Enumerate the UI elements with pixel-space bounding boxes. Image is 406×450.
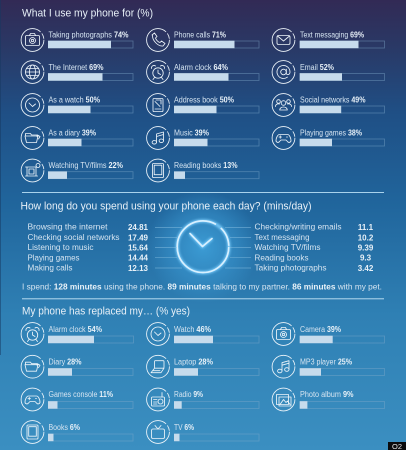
item: The Internet: The Internet 69% [48, 63, 104, 72]
item: Playing games [272, 127, 384, 149]
right list: 9.3 [360, 254, 372, 263]
item: Camera [272, 323, 384, 345]
item: Books: Books 6% [48, 423, 80, 432]
right list: 10.2 [358, 233, 374, 242]
left list: 24.81 [128, 223, 149, 232]
section: time spent [20, 201, 382, 292]
right list: 3.42 [358, 264, 374, 273]
summary sentence: I spend: 128 minutes using the phone. 89 minutes talking to my partner. 86 minutes with my pet. [22, 283, 382, 292]
right list: 9.39 [358, 244, 374, 252]
left list: 14.44 [128, 254, 149, 263]
item: As a watch: As a watch 50% [48, 95, 100, 104]
divider [22, 192, 384, 193]
item: Reading books [147, 159, 259, 182]
item: Phone calls: Phone calls 71% [174, 30, 226, 39]
item: Alarm clock: Alarm clock 64% [174, 63, 228, 72]
section: replaced devices [21, 306, 384, 443]
heading: What I use my phone for: What I use my phone for (%) [22, 8, 153, 20]
item: Phone calls [147, 29, 259, 51]
item: Reading books: Reading books 13% [174, 161, 238, 170]
item: Social networks: Social networks 49% [300, 95, 365, 104]
item: Text messaging [272, 29, 384, 51]
credit: O2 [388, 442, 406, 450]
left connector lines [155, 228, 182, 268]
left list: Listening to music [28, 243, 94, 252]
right list [254, 222, 374, 273]
left list: Playing games [28, 254, 80, 262]
right list: Checking/writing emails [254, 222, 342, 232]
item: Watching TV/films [21, 159, 133, 182]
item: The Internet [21, 61, 133, 83]
item: As a diary: As a diary 39% [48, 128, 96, 137]
left list: Making calls [28, 264, 72, 273]
right list: Reading books [254, 254, 308, 262]
item: As a watch [21, 94, 133, 116]
item: Taking photographs [21, 29, 133, 51]
section: phone uses [21, 8, 384, 182]
item: Watch: Watch 46% [174, 325, 211, 334]
item: Laptop: Laptop 28% [174, 358, 213, 366]
item: Diary [21, 355, 133, 378]
item: Radio [147, 388, 259, 411]
item: Radio: Radio 9% [174, 390, 203, 399]
item: Watch [147, 323, 259, 345]
item: Camera: Camera 39% [300, 325, 341, 334]
left list: Checking social networks [28, 233, 120, 242]
item: Watching TV/films: Watching TV/films 22% [48, 161, 123, 170]
item: Games console: Games console 11% [48, 390, 113, 399]
right list: Watching TV/films [254, 243, 320, 252]
heading: My phone has replaced my: My phone has replaced my… (% yes) [22, 306, 190, 318]
item: Photo album: Photo album 9% [300, 390, 354, 399]
item: Games console [21, 388, 133, 411]
item: Music: Music 39% [174, 128, 209, 137]
item: MP3 player [272, 355, 384, 378]
right connector lines [225, 228, 251, 268]
item: Social networks [272, 94, 384, 116]
item: Books [21, 421, 133, 443]
item: Email [272, 61, 384, 83]
item: Address book [147, 94, 259, 116]
item: Playing games: Playing games 38% [300, 128, 362, 137]
right list: Taking photographs [254, 264, 326, 273]
divider [22, 298, 384, 299]
item: Taking photographs: Taking photographs 74% [48, 30, 128, 39]
left list [28, 222, 149, 273]
item: Address book: Address book 50% [174, 95, 234, 104]
item: As a diary [21, 127, 133, 149]
left list: 12.13 [128, 264, 149, 273]
item: Photo album [272, 388, 384, 411]
item: Email: Email 52% [300, 63, 334, 72]
right list: Text messaging [254, 233, 310, 242]
item: Alarm clock [21, 323, 134, 345]
item: Alarm clock [147, 61, 259, 83]
item: Diary: Diary 28% [48, 358, 81, 366]
item: TV [147, 421, 259, 443]
right list: 11.1 [358, 223, 374, 232]
item: Laptop [147, 355, 259, 378]
item: MP3 player: MP3 player 25% [300, 358, 352, 366]
left list: 17.49 [128, 233, 149, 242]
clock icon [177, 221, 229, 272]
item: Text messaging: Text messaging 69% [300, 30, 364, 39]
heading: How long do you spend: How long do you spend using your phone each day? (mins/day) [20, 201, 312, 213]
left list: 15.64 [128, 244, 149, 252]
left list: Browsing the internet [28, 222, 108, 232]
item: Music [147, 127, 259, 149]
item: Alarm clock: Alarm clock 54% [48, 325, 102, 334]
item: TV: TV 6% [174, 423, 194, 432]
